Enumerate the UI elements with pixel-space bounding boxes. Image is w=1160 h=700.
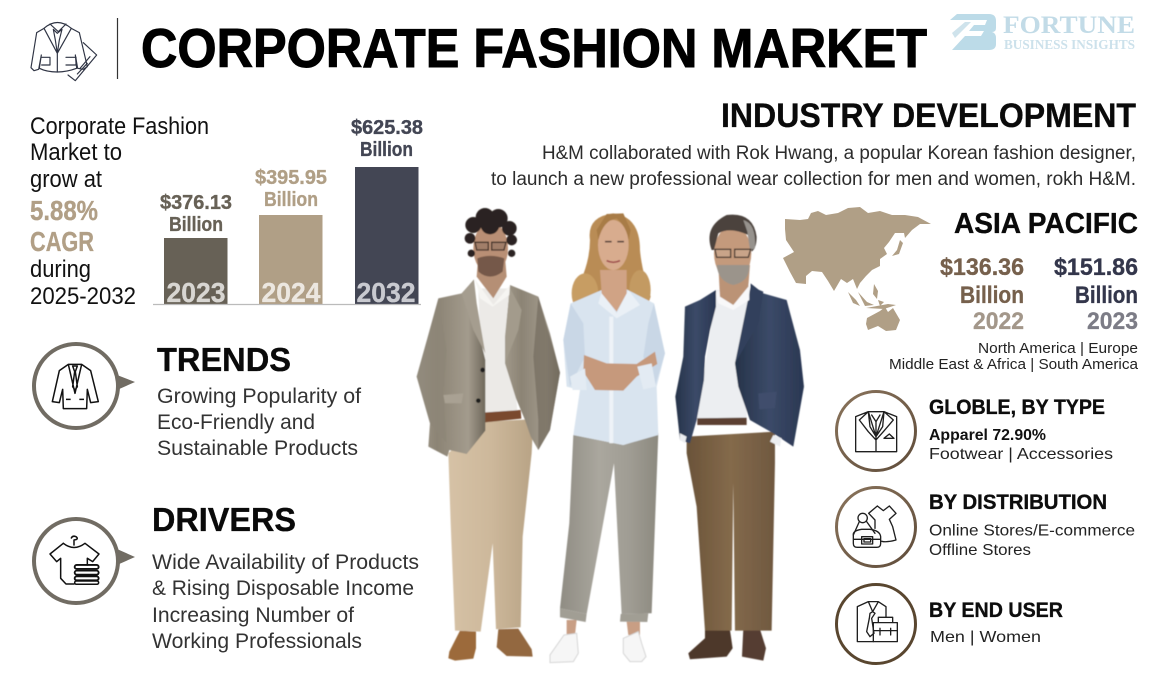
header divider: [116, 18, 118, 79]
text: trends list: Eco-Friendly and: [157, 411, 315, 434]
map: Asia Pacific: [783, 207, 931, 331]
panel: global by type: [836, 392, 1113, 470]
bar 2024: $395.95: [255, 167, 327, 189]
text: CAGR statement: [30, 113, 209, 310]
figure: 2023 value: Billion: [1075, 282, 1138, 309]
text: CAGR statement: Market to: [30, 139, 122, 166]
bar 2023: 2023: [166, 277, 226, 308]
bar 2032: Billion: [360, 139, 413, 161]
figure: 2022 value: 2022: [973, 308, 1024, 335]
figure: 2022 value: Billion: [960, 282, 1024, 309]
icon: bag and dress circle: [836, 488, 916, 566]
heading: industry development: INDUSTRY DEVELOPMENT: [721, 97, 1136, 135]
text: type segments: Footwear | Accessories: [929, 446, 1113, 463]
bar 2024: [255, 167, 327, 308]
text: distribution segments: [929, 522, 1135, 559]
text: trends list: Sustainable Products: [157, 437, 358, 460]
title: CORPORATE FASHION MARKET: [141, 17, 927, 79]
text: CAGR statement: grow at: [30, 166, 102, 193]
bar chart: market size: [153, 117, 423, 308]
text: CAGR statement: Corporate Fashion: [30, 113, 209, 140]
text: industry development body: to launch a new professional wear collection for men and women, rokh H&M.: [491, 169, 1136, 190]
text: industry development body: [491, 143, 1136, 190]
text: drivers list: [152, 551, 419, 653]
person: man in navy blazer: [675, 215, 804, 661]
icon: trends blazer bubble: [34, 344, 135, 428]
figure: 2022 value: $136.36: [940, 254, 1024, 281]
panel: Asia Pacific figures: [889, 208, 1139, 373]
heading: by end user: BY END USER: [929, 598, 1063, 622]
heading: Asia Pacific: ASIA PACIFIC: [954, 208, 1138, 240]
icon: jacket circle: [836, 392, 916, 470]
text: type segments: [929, 427, 1113, 463]
photo: three professionals: [417, 208, 804, 663]
text: distribution segments: Online Stores/E-commerce: [929, 522, 1135, 540]
panel: by distribution: [836, 488, 1135, 566]
heading: trends: TRENDS: [157, 341, 291, 378]
icon: suit jacket header: [31, 22, 97, 81]
bar 2024: Billion: [264, 189, 318, 211]
bar 2023: $376.13: [160, 192, 232, 214]
panel: by end user: [836, 584, 1063, 664]
text: trends list: Growing Popularity of: [157, 385, 361, 408]
text: other regions: Middle East & Africa | South America: [889, 356, 1139, 373]
text: drivers list: & Rising Disposable Income: [152, 577, 414, 600]
text: end user segments: Men | Women: [930, 629, 1041, 646]
bar 2032: $625.38: [351, 117, 423, 139]
heading: by distribution: BY DISTRIBUTION: [929, 490, 1107, 514]
heading: drivers: DRIVERS: [152, 501, 296, 538]
figure: 2022 value: [940, 254, 1024, 335]
bar 2032: [351, 117, 423, 308]
text: industry development body: H&M collaborated with Rok Hwang, a popular Korean fashion designer,: [542, 143, 1136, 164]
panel: trends: [34, 341, 361, 460]
text: CAGR statement: during: [30, 256, 91, 283]
bar 2032: 2032: [356, 277, 416, 308]
text: other regions: North America | Europe: [978, 340, 1138, 357]
figure: 2023 value: 2023: [1087, 308, 1138, 335]
text: CAGR statement: 5.88%: [30, 195, 98, 226]
person: man in beige blazer: [417, 208, 560, 661]
icon: drivers t-shirt bubble: [34, 519, 135, 603]
figure: 2023 value: $151.86: [1054, 254, 1138, 281]
bar 2024: 2024: [262, 277, 321, 308]
text: type segments: Apparel 72.90%: [929, 427, 1046, 444]
heading: by type: GLOBLE, BY TYPE: [929, 395, 1105, 419]
text: other regions: [889, 340, 1139, 373]
bar 2023: [160, 192, 232, 308]
logo: Fortune Business Insights: [950, 12, 1135, 52]
logo: Fortune Business Insights: FORTUNE: [1003, 12, 1135, 39]
logo: Fortune Business Insights: BUSINESS INSIGHTS: [1004, 37, 1135, 52]
text: drivers list: Working Professionals: [152, 630, 362, 653]
text: CAGR statement: CAGR: [30, 226, 94, 257]
text: drivers list: Wide Availability of Products: [152, 551, 419, 574]
figure: 2023 value: [1054, 254, 1138, 335]
person: woman in light blue shirt: [550, 213, 665, 663]
text: trends list: [157, 385, 361, 460]
panel: drivers: [34, 501, 419, 653]
icon: shirt and briefcase circle: [836, 584, 916, 664]
text: CAGR statement: 2025-2032: [30, 283, 136, 310]
text: distribution segments: Offline Stores: [929, 542, 1031, 559]
bar 2023: Billion: [169, 214, 223, 236]
text: drivers list: Increasing Number of: [152, 604, 354, 627]
